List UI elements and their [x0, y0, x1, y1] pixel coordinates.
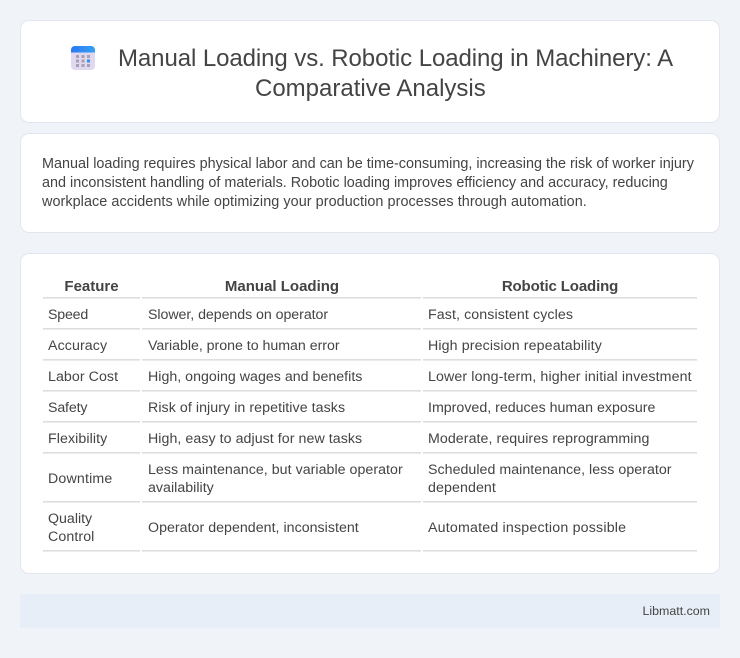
title: Manual Loading vs. Robotic Loading in Machinery: A [118, 45, 673, 72]
panel: intro text card [20, 133, 720, 233]
table header: Feature [64, 278, 119, 295]
intro paragraph: and inconsistent handling of materials. Robotic loading improves efficiency and accuracy, reducing [42, 175, 668, 191]
row: quality control: Quality [48, 511, 92, 527]
table header: Manual Loading [225, 278, 339, 295]
row: quality control: Automated inspection possible [428, 520, 626, 536]
row: accuracy: High precision repeatability [428, 338, 602, 354]
row: speed: Slower, depends on operator [148, 307, 328, 323]
row: safety: Improved, reduces human exposure [428, 400, 655, 416]
row: speed: Fast, consistent cycles [428, 307, 573, 323]
icon: calendar [71, 46, 95, 70]
panel: comparison table card [20, 253, 720, 574]
table header: Robotic Loading [502, 278, 618, 295]
row: flexibility [48, 431, 649, 447]
intro paragraph: Manual loading requires physical labor and can be time-consuming, increasing the risk of worker injury [42, 156, 694, 172]
title: Comparative Analysis [255, 75, 486, 102]
title [118, 45, 673, 102]
row: safety [48, 400, 655, 416]
row: downtime: Less maintenance, but variable operator [148, 462, 403, 478]
row: accuracy: Variable, prone to human error [148, 338, 340, 354]
row: downtime: Downtime [48, 471, 112, 487]
panel: title card [20, 20, 720, 123]
row: quality control: Operator dependent, inconsistent [148, 520, 359, 536]
row: quality control [48, 511, 626, 545]
row: safety: Risk of injury in repetitive tasks [148, 400, 345, 416]
footer bar [20, 594, 720, 628]
footer credit: Libmatt.com [643, 604, 710, 618]
row: quality control: Control [48, 529, 94, 545]
row: flexibility: High, easy to adjust for new tasks [148, 431, 362, 447]
row: downtime: Scheduled maintenance, less operator [428, 462, 672, 478]
row: flexibility: Flexibility [48, 431, 107, 447]
row: flexibility: Moderate, requires reprogramming [428, 431, 649, 447]
row: labor cost: Labor Cost [48, 369, 118, 385]
intro paragraph: workplace accidents while optimizing your production processes through automation. [42, 194, 587, 210]
comparison table [43, 278, 697, 552]
row: labor cost: Lower long-term, higher initial investment [428, 369, 692, 385]
row: labor cost: High, ongoing wages and benefits [148, 369, 362, 385]
table header [64, 278, 618, 295]
row: accuracy: Accuracy [48, 338, 107, 354]
row: downtime: availability [148, 480, 214, 496]
row: labor cost [48, 369, 692, 385]
row: speed [48, 307, 573, 323]
row: downtime: dependent [428, 480, 496, 496]
row: accuracy [48, 338, 602, 354]
row: downtime [48, 462, 672, 496]
intro paragraph [42, 156, 694, 210]
row: speed: Speed [48, 307, 88, 323]
row: safety: Safety [48, 400, 87, 416]
